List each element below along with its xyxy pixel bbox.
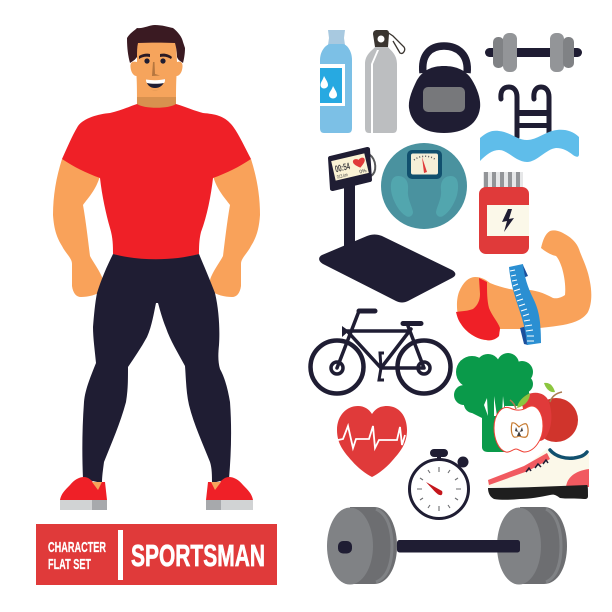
subtitle line 1: CHARACTER xyxy=(48,539,106,556)
icon: flexed arm with measuring tape xyxy=(456,230,591,345)
bar xyxy=(397,540,520,552)
left foot xyxy=(391,176,413,217)
treadmill screen xyxy=(331,153,369,181)
title banner xyxy=(36,524,277,585)
icon: broccoli xyxy=(454,353,533,452)
icon: supplement jar xyxy=(479,172,529,254)
mouth xyxy=(146,79,165,88)
shoe collar xyxy=(550,450,587,458)
treadmill handles xyxy=(331,154,375,186)
icon: water bottle xyxy=(320,30,352,133)
right plate xyxy=(497,507,567,584)
icon: kettlebell xyxy=(409,46,480,133)
left eye xyxy=(144,58,150,64)
character: sportsman xyxy=(53,25,260,510)
icon: running shoe xyxy=(488,448,589,500)
icon: bathroom scale xyxy=(381,143,467,229)
left plate xyxy=(327,507,397,584)
headlight xyxy=(342,326,349,337)
t-shirt xyxy=(62,104,251,261)
shoe heel patch xyxy=(566,469,589,487)
left eyebrow xyxy=(139,54,150,59)
shoe sole xyxy=(488,485,588,500)
shoe laces xyxy=(526,460,548,472)
water waves xyxy=(480,130,579,162)
icon: bicycle xyxy=(310,311,450,394)
title: SPORTSMAN xyxy=(131,538,265,573)
icon: apples xyxy=(494,383,578,452)
icon: stopwatch xyxy=(410,449,468,518)
treadmill screen: 0% xyxy=(359,168,368,175)
right arm xyxy=(210,159,260,297)
icon: steel bottle xyxy=(365,30,405,133)
tape front xyxy=(509,264,541,345)
tape back xyxy=(520,265,528,345)
saddle xyxy=(403,321,421,326)
banner background xyxy=(36,524,277,585)
right eyebrow xyxy=(160,54,172,59)
broccoli stem gaps xyxy=(484,396,505,416)
treadmill screen: 013 km xyxy=(336,172,348,181)
lip shadow xyxy=(150,89,160,90)
pedals xyxy=(379,353,384,380)
right foot xyxy=(436,176,458,217)
icon: treadmill xyxy=(319,147,455,302)
red sports top xyxy=(456,278,500,340)
icon: swimming pool ladder xyxy=(480,87,579,162)
handlebar xyxy=(359,308,375,314)
shoe stripe xyxy=(488,453,550,485)
left shoe xyxy=(60,477,107,510)
right shoe xyxy=(206,477,253,510)
left arm xyxy=(53,159,103,297)
neck shadow xyxy=(137,97,176,112)
treadmill screen: 00:54 xyxy=(334,161,352,175)
tape ticks xyxy=(510,270,534,341)
stopwatch needle xyxy=(426,482,442,495)
teeth xyxy=(146,79,165,84)
icon: dumbbell xyxy=(485,33,582,72)
nose xyxy=(152,62,160,76)
banner divider xyxy=(118,530,123,580)
subtitle line 2: FLAT SET xyxy=(48,556,91,573)
icon: heart with pulse xyxy=(337,406,407,477)
leggings xyxy=(82,254,231,483)
apple half xyxy=(494,406,543,452)
right eye xyxy=(160,58,166,64)
hair xyxy=(127,25,185,63)
icon: barbell xyxy=(327,507,567,584)
head and neck xyxy=(130,42,183,112)
scale dial xyxy=(407,150,442,179)
